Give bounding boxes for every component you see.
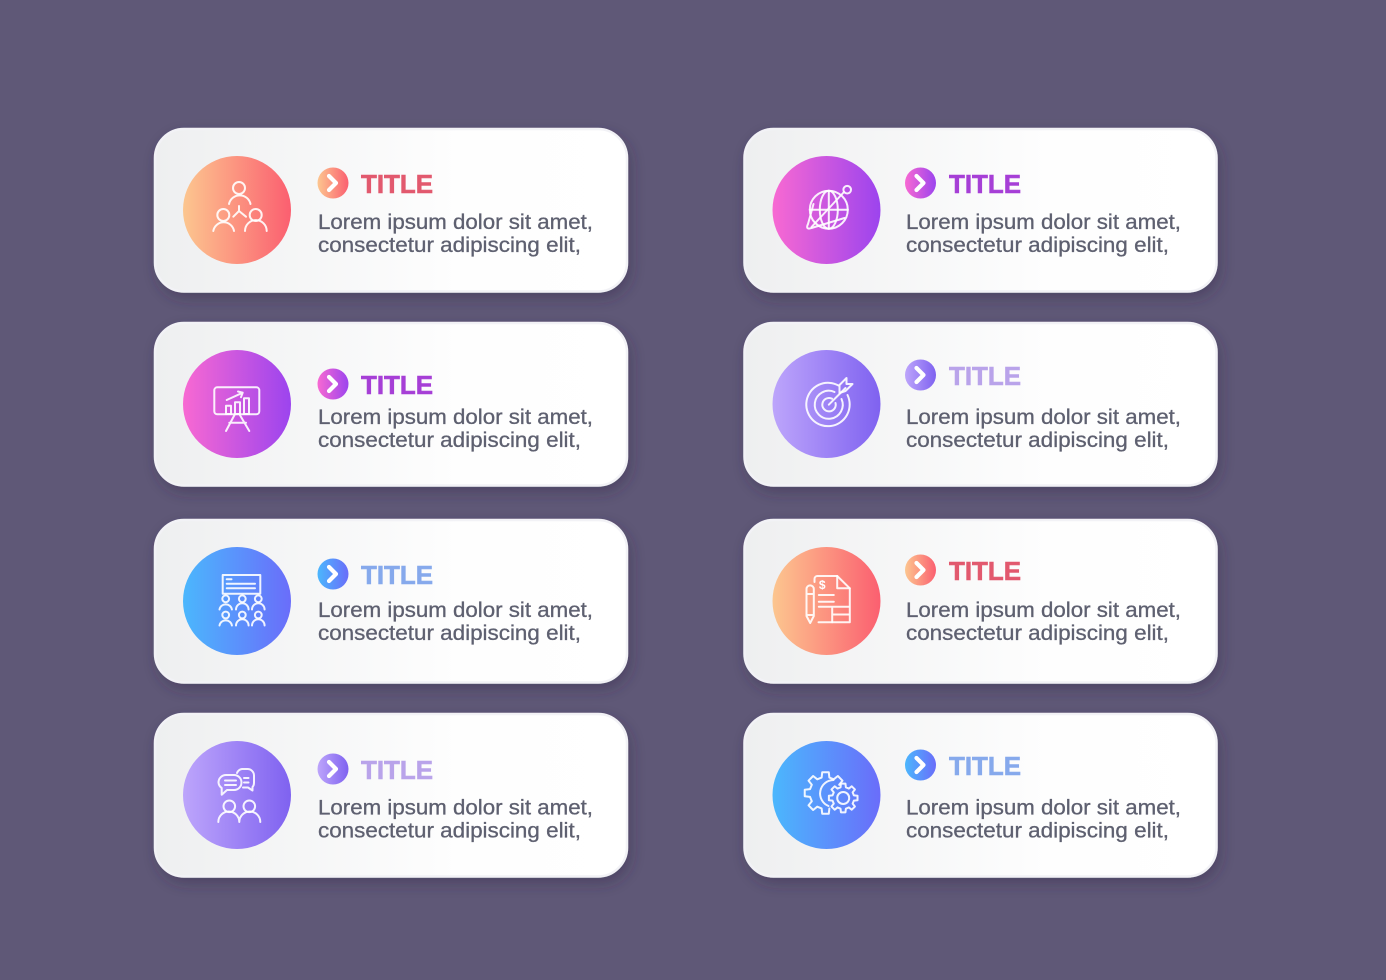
panel: left card 3: consectetur adipiscing elit, [318,622,581,645]
panel: left card 1: Lorem ipsum dolor sit amet, [318,211,593,234]
icon: classroom [220,575,265,626]
panel: left card 4: consectetur adipiscing elit, [318,820,581,842]
icon: target [806,378,852,426]
panel: right card 2: Lorem ipsum dolor sit amet, [906,406,1181,429]
panel: left card 1 [155,129,627,292]
panel: left card 3: Lorem ipsum dolor sit amet, [318,599,593,622]
panel: right card 4: TITLE [949,751,1021,781]
panel: left card 4: Lorem ipsum dolor sit amet, [318,796,593,820]
icon: gears [805,772,858,814]
panel: left card 2: Lorem ipsum dolor sit amet, [318,406,593,429]
panel: right card 1: TITLE [949,169,1021,199]
panel: right card 1 [744,129,1216,292]
panel: right card 1: consectetur adipiscing elit, [906,234,1169,257]
panel: right card 3: TITLE [949,556,1021,586]
panel: left card 1: consectetur adipiscing elit, [318,234,581,257]
icon: invoice and pencil: $ [819,578,826,592]
panel: right card 3 [744,520,1216,682]
panel: right card 4 [744,714,1216,876]
icon: invoice and pencil [806,576,850,623]
panel: right card 4: Lorem ipsum dolor sit amet, [906,796,1181,820]
panel: right card 2: TITLE [949,361,1021,391]
icon: discussion [218,769,260,822]
icon: team hierarchy [213,182,267,231]
panel: right card 3: consectetur adipiscing elit, [906,622,1169,645]
panel: left card 3: TITLE [361,560,433,590]
icon: presentation board [214,387,259,431]
panel: right card 1: Lorem ipsum dolor sit amet, [906,211,1181,234]
panel: left card 3 [155,520,627,682]
panel: left card 4 [155,714,627,876]
panel: left card 1: TITLE [361,169,433,199]
panel: right card 2 [744,323,1216,486]
panel: left card 2: TITLE [361,370,433,400]
panel: left card 2 [155,323,627,486]
icon: globe [807,186,851,229]
panel: left card 4: TITLE [361,755,433,785]
panel: left card 2: consectetur adipiscing elit, [318,429,581,452]
panel: right card 3: Lorem ipsum dolor sit amet, [906,599,1181,622]
panel: right card 2: consectetur adipiscing elit, [906,429,1169,452]
panel: right card 4: consectetur adipiscing elit, [906,820,1169,842]
